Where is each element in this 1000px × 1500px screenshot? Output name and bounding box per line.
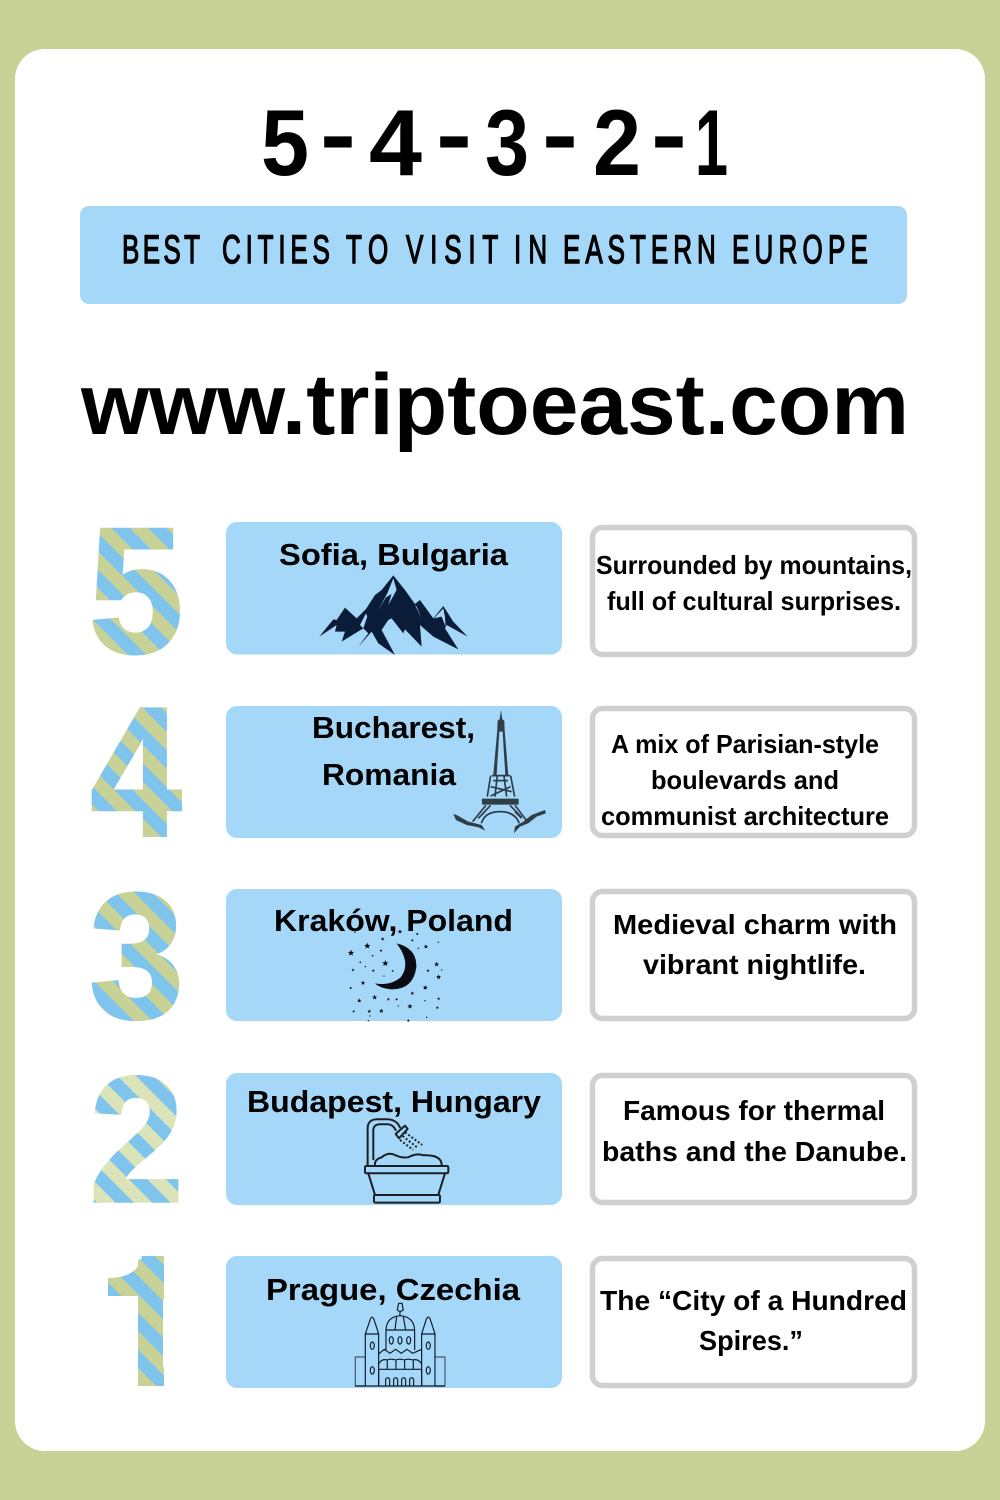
title: 1 <box>695 90 728 195</box>
city card: Sofia <box>226 522 562 654</box>
description box: Sofia: Surrounded by mountains, <box>596 550 912 580</box>
icon: bathtub with shower <box>365 1119 448 1203</box>
website url: www.triptoeast.com <box>80 357 909 453</box>
city card: Krakow <box>226 889 562 1021</box>
icon: Eiffel tower <box>453 710 546 833</box>
description box: Bucharest: communist architecture <box>601 801 889 831</box>
subtitle banner <box>80 206 907 304</box>
description box: Prague: The “City of a Hundred <box>600 1285 907 1316</box>
description box: Sofia <box>592 528 914 654</box>
panel: rank 5 Sofia <box>89 491 914 690</box>
icon: cathedral <box>355 1303 445 1386</box>
title: - <box>436 81 472 186</box>
city name: Bucharest <box>312 710 475 792</box>
subtitle banner: TO <box>346 227 388 272</box>
subtitle banner: EASTERN <box>563 227 716 272</box>
icon: moon and stars <box>348 929 442 1022</box>
description box: Krakow: Medieval charm with <box>613 909 897 940</box>
description box: Sofia: full of cultural surprises. <box>607 586 901 616</box>
description box: Budapest <box>592 1076 914 1202</box>
city name: Bucharest: Romania <box>322 757 457 792</box>
number 2: 2 <box>90 1040 184 1239</box>
description box: Prague <box>592 1258 914 1386</box>
city name: Budapest: Budapest, Hungary <box>247 1084 542 1119</box>
title: - <box>320 81 356 186</box>
title: 5 <box>261 90 309 195</box>
number 1: 1 <box>95 1219 197 1425</box>
description box: Budapest: baths and the Danube. <box>602 1136 907 1167</box>
subtitle banner: BEST <box>122 227 200 272</box>
description box: Bucharest: A mix of Parisian-style <box>611 729 879 759</box>
title: - <box>542 81 578 186</box>
panel: rank 1 Prague <box>108 1256 918 1388</box>
subtitle banner: VISIT <box>406 227 498 272</box>
number 4: 4 <box>90 668 182 874</box>
city name: Prague: Prague, Czechia <box>266 1272 521 1307</box>
description box: Krakow: vibrant nightlife. <box>643 949 866 980</box>
number 3: 3 <box>90 856 184 1056</box>
city name: Bucharest: Bucharest, <box>312 710 475 745</box>
description box: Prague: Spires.” <box>699 1325 803 1356</box>
title: 3 <box>485 90 529 195</box>
panel: rank 3 Krakow <box>90 856 914 1056</box>
number 5: 5 <box>89 491 183 690</box>
subtitle banner: CITIES <box>222 227 330 272</box>
title <box>261 81 728 195</box>
panel: rank 2 Budapest <box>90 1040 914 1239</box>
number 1 <box>108 1256 164 1386</box>
description box: Krakow <box>592 892 914 1018</box>
description box: Budapest: Famous for thermal <box>623 1095 885 1126</box>
subtitle banner: IN <box>514 227 547 272</box>
title: - <box>651 81 687 186</box>
panel: rank 4 Bucharest <box>90 668 914 874</box>
subtitle banner: EUROPE <box>732 227 868 272</box>
description box: Bucharest: boulevards and <box>651 765 839 795</box>
title: 2 <box>593 90 641 195</box>
city card: Prague <box>226 1256 562 1388</box>
icon: mountain <box>319 575 468 655</box>
city card: Budapest <box>226 1073 562 1205</box>
city name: Sofia: Sofia, Bulgaria <box>279 537 509 572</box>
city name: Krakow: Kraków, Poland <box>274 903 513 938</box>
description box: Bucharest <box>592 708 914 836</box>
title: 4 <box>369 90 422 195</box>
city card: Bucharest <box>226 706 562 838</box>
